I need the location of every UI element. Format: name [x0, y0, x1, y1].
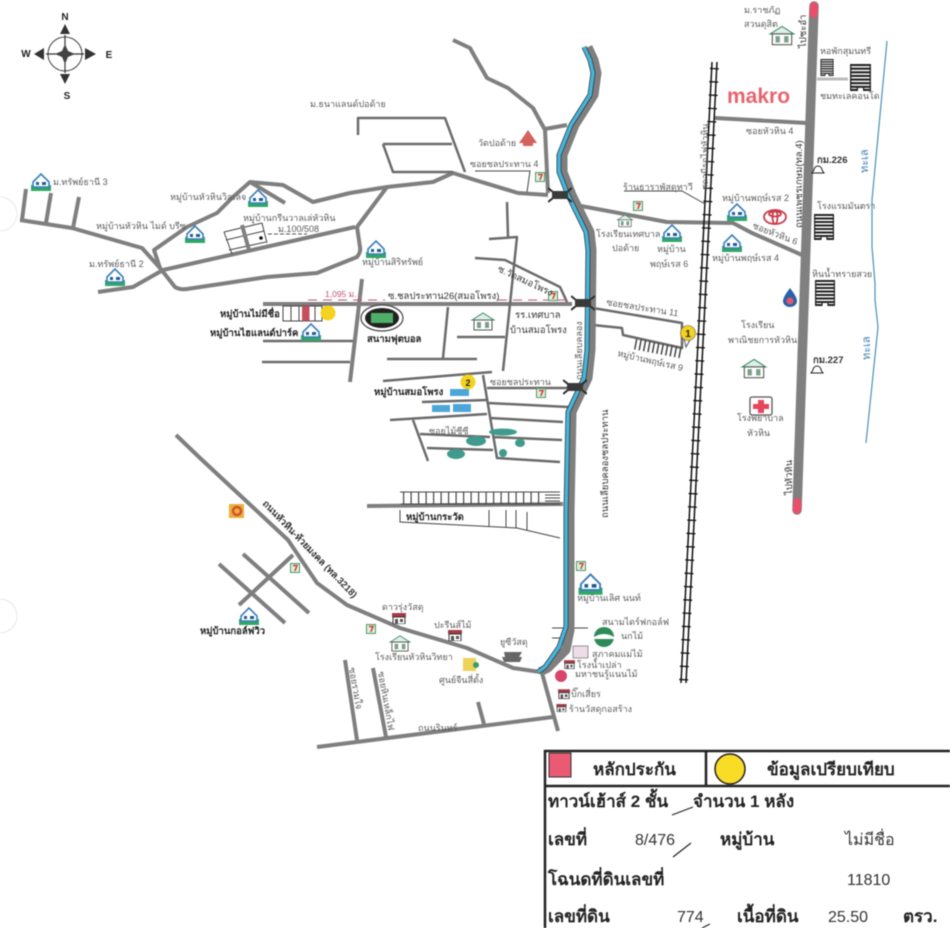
map labels: วัดปอด้าย: [478, 138, 516, 148]
map labels: หมู่บ้านไม่มีชื่อ: [220, 306, 280, 321]
map labels: 1,095 ม.: [325, 289, 357, 299]
map labels: หมู่บ้านสมอโพรง: [374, 386, 444, 399]
map labels: หมู่บ้านสิริทรัพย์: [362, 256, 423, 268]
legend: yellow comparable marker: [715, 754, 745, 784]
compass rose: S: [64, 91, 71, 102]
central road network: [262, 202, 572, 462]
compass rose: [21, 12, 113, 102]
map labels: ม.ทรัพย์ธานี 3: [53, 176, 108, 187]
subject property row with red block: [283, 306, 322, 321]
map labels: พฤษ์เรส 6: [650, 258, 688, 269]
map labels: ซอยหัวหิน 6: [751, 221, 799, 247]
map labels: ทะเล: [859, 149, 871, 173]
comparable markers: 1: [685, 329, 691, 340]
property details: 25.50: [828, 909, 868, 926]
makro logo: makro: [727, 85, 790, 108]
icon: hospital: [750, 397, 772, 415]
map labels: ปะรีนส์ไม้: [434, 619, 472, 630]
map labels: กม.227: [813, 355, 844, 366]
map labels: ซอยรวมใจ: [347, 667, 364, 710]
map labels: ชมทะเลคอนโด: [820, 91, 880, 101]
property details: 11810: [847, 872, 890, 889]
comparable markers: [320, 306, 696, 390]
map labels: ซอยหัวหิน 4: [746, 126, 793, 136]
property details: หมู่บ้าน: [720, 830, 775, 851]
railway: [681, 62, 717, 683]
map labels: กม.226: [817, 155, 848, 166]
map labels: ม.ทรัพย์ธานี 2: [89, 258, 144, 269]
map labels: ไปหัวหิน: [783, 459, 795, 496]
shops and landmarks south: [392, 166, 824, 712]
map labels: สุภาคมแม่ไม้: [592, 649, 643, 660]
map labels: มหาชนรู้แนนไม้: [575, 669, 638, 680]
map labels: สถานีรถไฟหัวหิน: [700, 124, 710, 190]
compass rose: N: [61, 12, 69, 23]
legend table: [545, 751, 950, 928]
map labels: ถนนหัวหิน-ห้วยมงคล (ทล.3218): [260, 498, 360, 601]
housing estate strip: หมู่บ้านกระวัด: [406, 511, 464, 524]
icons: condo towers: [814, 59, 871, 306]
property details: เลขที่: [548, 827, 587, 849]
compass rose: W: [21, 49, 31, 60]
map labels: โรงเรียนหัวหินวิทยา: [375, 652, 453, 662]
map labels: หินน้ำทรายสวย: [812, 267, 872, 279]
map labels: หมู่บ้านหัวหิน ไมด์ บรีซ: [96, 220, 186, 232]
comparable markers: 2: [465, 378, 471, 388]
map labels: ม.ธนาแลนด์ปอด้าย: [310, 98, 386, 109]
map labels: ทะเล: [861, 336, 873, 360]
property details: ไม่มีชื่อ: [843, 828, 895, 849]
east roads: [581, 79, 848, 353]
map labels: ม.ราชภัฏ: [744, 5, 780, 15]
map labels: ดาวรุ่งวัสดุ: [382, 602, 424, 613]
icons: schools: [390, 26, 794, 651]
sea shoreline: [866, 41, 887, 443]
legend: red collateral marker: [549, 753, 571, 777]
map labels: หมู่บ้านกอล์ฟวิว: [200, 625, 265, 638]
property details: จำนวน 1 หลัง: [693, 792, 794, 811]
map labels: ถนนรินทร์: [418, 722, 458, 733]
map labels: ซอยไม้ซีซี: [429, 426, 468, 436]
map labels: โรงน้ำเปล่า: [577, 658, 622, 670]
map labels: หมู่บ้านหัวหินวิลเลจ: [170, 192, 246, 203]
map labels: หมู่บ้าน: [657, 244, 686, 255]
map labels: หมู่บ้านกรีนวาลเล่หัวหิน: [243, 213, 336, 224]
legend: comparable label: ข้อมูลเปรียบเทียบ: [767, 759, 895, 781]
map labels: สวนดุสิต: [744, 19, 778, 30]
property details: 8/476: [635, 832, 675, 849]
property details: เลขที่ดิน: [548, 904, 610, 926]
property details: เนื้อที่ดิน: [737, 903, 799, 926]
map labels: ปอด้าย: [612, 243, 639, 253]
map labels: ร้านธาราพัสดุทาวี: [623, 182, 693, 193]
icon: PTT station: [783, 288, 797, 307]
leader lines: [475, 171, 705, 204]
property details: [547, 788, 937, 928]
map labels: โรงแรมมันตรา: [817, 201, 875, 211]
map labels: ถนนเลียบคลองชลประทาน: [599, 409, 611, 518]
map labels: โรงเรียนเทศบาล: [596, 229, 660, 239]
map labels: โรงพยาบาล: [737, 413, 784, 423]
map labels: สนามฟุตบอล: [367, 333, 422, 345]
map labels: ถนนเพชรเกษม(ทล.4): [794, 140, 805, 228]
property details: โฉนดที่ดินเลขที่: [547, 867, 664, 889]
map labels: สนามไดร์ฟกอล์ฟ: [602, 616, 669, 627]
map labels: ศูนย์จีนสี่ตั้ง: [439, 673, 483, 686]
blue town-house clusters: [432, 389, 471, 412]
map labels: ซอยชลประทาน 4: [470, 159, 538, 169]
housing estate strip: [367, 492, 563, 538]
map labels: หอพักสุมนทรี: [820, 46, 871, 57]
property details: 774: [677, 909, 704, 926]
map labels: หมู่บ้านไฮแลนด์ปาร์ค: [210, 327, 298, 340]
map labels: ม.100/508: [278, 224, 319, 234]
map labels: พาณิชยการหัวหิน: [728, 335, 797, 345]
property details: ตรว.: [903, 907, 937, 926]
football stadium: [361, 305, 403, 331]
compass rose: E: [106, 50, 113, 61]
map labels: ซ.วัดสมอโพรง: [496, 263, 555, 299]
map labels: ไปชะอำ: [797, 15, 809, 49]
map labels: หมู่บ้านพฤษ์เรส 4: [712, 252, 779, 264]
icon: Toyota logo: [764, 210, 786, 224]
map labels: [53, 5, 880, 733]
south-west road network: [176, 435, 588, 747]
map labels: ร้านวัสดุกอสร้าง: [569, 704, 632, 715]
map labels: ซอยชลประทาน 11: [606, 297, 679, 318]
map labels: หมู่บ้านพฤษ์เรส 9: [616, 347, 684, 374]
bridges: [548, 188, 595, 394]
canal and parallel road: [538, 47, 597, 672]
map labels: ซอยหินเหล็กไฟ: [376, 670, 398, 731]
map labels: หัวหิน: [747, 428, 770, 438]
map labels: ซอยชลประทาน: [490, 377, 551, 387]
property details: ทาวน์เฮ้าส์ 2 ชั้น: [548, 788, 668, 811]
map labels: หมู่บ้านพฤษ์เรส 2: [722, 192, 789, 204]
map labels: ยูซีวัสดุ: [500, 637, 528, 648]
scan punch holes: [0, 197, 17, 633]
map labels: รร.เทศบาล: [515, 310, 561, 321]
map labels: บิ๊กเสี่ยร: [571, 687, 601, 699]
map labels: ซ.ชลประทาน26(สมอโพรง): [388, 290, 499, 302]
Big C logo: [229, 504, 244, 518]
icons: housing villages: [31, 174, 747, 625]
icons: 7-eleven stores: [290, 172, 642, 634]
map labels: โรงเรียน: [741, 320, 774, 330]
highway: [797, 6, 814, 510]
map labels: บ้านสมอโพรง: [510, 324, 567, 336]
legend: collateral label: หลักประกัน: [593, 760, 676, 779]
map labels: หมู่บ้านเลิศ นนท์: [577, 592, 641, 604]
map labels: ถนนเลียบคลอง: [574, 321, 584, 380]
icon: temple: [519, 130, 537, 146]
map labels: นกไม้: [621, 631, 643, 641]
west road network: [20, 40, 567, 292]
tree clusters: [447, 428, 525, 459]
